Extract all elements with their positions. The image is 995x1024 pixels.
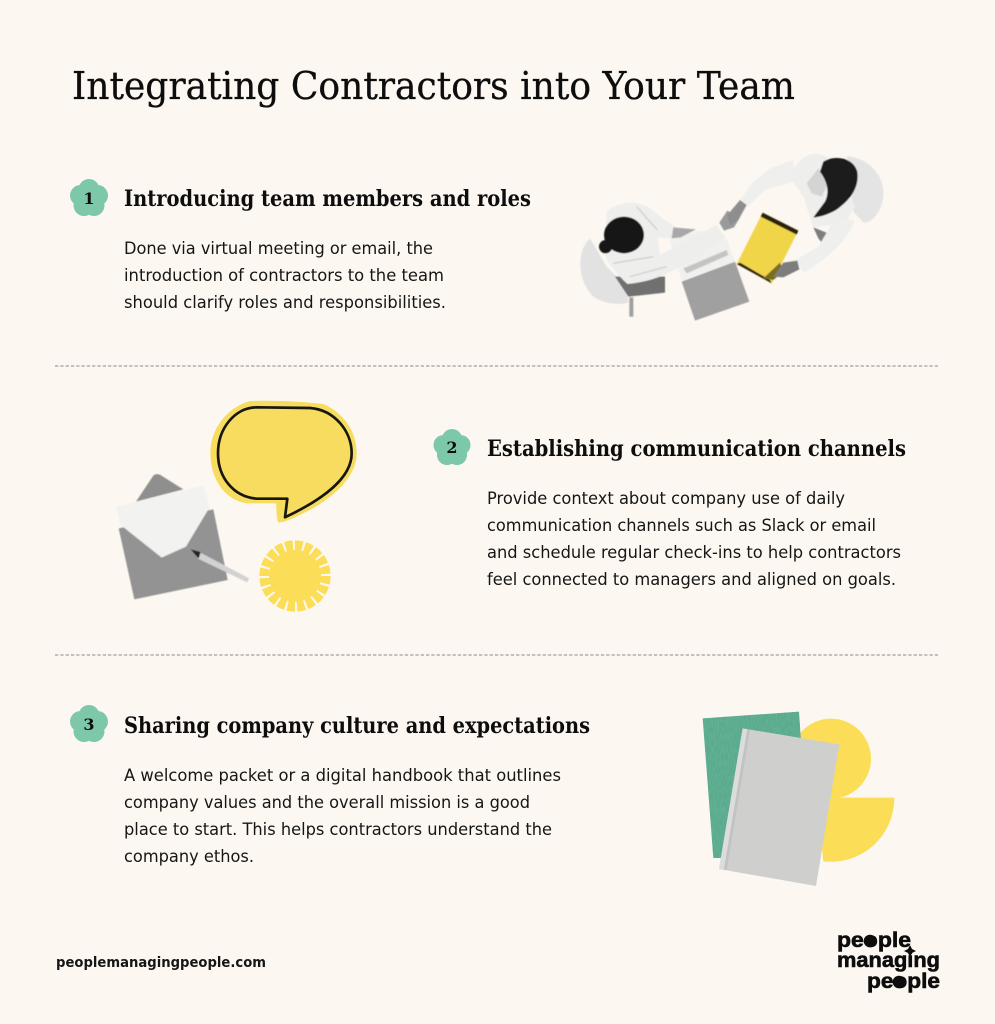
icon: sun [265, 546, 325, 606]
text block 2 [487, 489, 901, 590]
footer url: peoplemanagingpeople.com [56, 955, 266, 971]
text block 1: Done via virtual meeting or email, the [124, 239, 433, 259]
number badge 3: 3 [83, 715, 95, 734]
section 1: introducing team members [70, 154, 883, 321]
divider [55, 654, 938, 656]
illustration: envelope, speech bubble and sun [116, 401, 357, 606]
number badge 3 [70, 705, 108, 742]
illustration: books and yellow shapes [703, 712, 894, 886]
text block 1 [124, 239, 446, 313]
text block 3: company ethos. [124, 847, 254, 867]
text block 3 [124, 766, 561, 867]
text block 3: place to start. This helps contractors understand the [124, 820, 552, 840]
text block 1: introduction of contractors to the team [124, 266, 444, 286]
section 2: establishing communication channels [116, 401, 906, 606]
number badge 2: 2 [446, 438, 458, 457]
title: Integrating Contractors into Your Team [72, 64, 795, 108]
text block 2: communication channels such as Slack or email [487, 516, 876, 536]
section 3: sharing company culture [70, 705, 894, 886]
text block 3: A welcome packet or a digital handbook that outlines [124, 766, 561, 786]
divider [55, 365, 938, 367]
heading 2: Establishing communication channels [487, 436, 906, 462]
logo [837, 929, 940, 993]
text block 2: feel connected to managers and aligned on goals. [487, 570, 896, 590]
illustration: handshake seen from above [580, 154, 883, 321]
heading 3: Sharing company culture and expectations [124, 713, 590, 739]
logo: people [837, 929, 911, 952]
logo: managing [837, 949, 940, 972]
number badge 1 [70, 179, 108, 216]
heading 1: Introducing team members and roles [124, 186, 531, 212]
text block 2: Provide context about company use of daily [487, 489, 845, 509]
number badge 2 [434, 429, 470, 465]
number badge 1: 1 [83, 189, 95, 208]
icon: speech bubble [210, 401, 357, 523]
text block 1: should clarify roles and responsibilities. [124, 293, 446, 313]
icon: envelope with letter and pen [116, 474, 249, 599]
text block 3: company values and the overall mission is a good [124, 793, 530, 813]
text block 2: and schedule regular check-ins to help contractors [487, 543, 901, 563]
logo: people [867, 970, 940, 993]
